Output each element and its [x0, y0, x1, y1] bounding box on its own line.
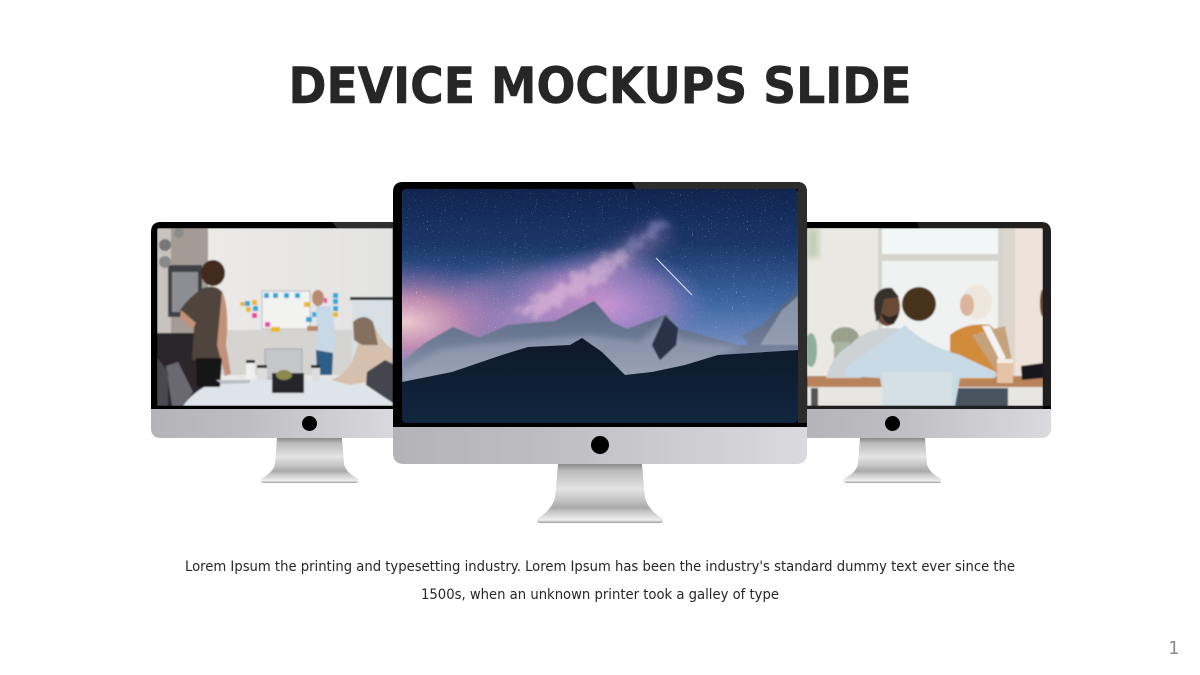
title: DEVICE MOCKUPS SLIDE [288, 57, 912, 115]
night sky [402, 189, 798, 376]
right monitor [800, 222, 1051, 483]
right monitor camera [885, 416, 900, 431]
page number: 1 [1168, 638, 1180, 659]
snowy mountains [402, 290, 798, 382]
left monitor stand [261, 438, 358, 483]
dark forest [402, 338, 798, 423]
body text: Lorem Ipsum the printing and typesetting industry. Lorem Ipsum has been the industry's standard dummy text ever since the [185, 559, 1015, 575]
left monitor bezel [151, 222, 400, 409]
left monitor [151, 222, 400, 483]
body text: 1500s, when an unknown printer took a galley of type [421, 587, 779, 603]
star field [402, 189, 798, 354]
right screen photo: team at table [805, 228, 1046, 406]
body text [185, 559, 1015, 603]
left screen photo: meeting at whiteboard [157, 228, 393, 406]
right monitor stand [844, 438, 941, 483]
milky way [495, 218, 672, 330]
right monitor bezel [800, 222, 1051, 409]
shooting star [656, 258, 692, 295]
slide [151, 65, 1178, 654]
left monitor chin [151, 408, 400, 438]
center monitor [393, 182, 807, 523]
center monitor bezel [393, 182, 807, 427]
center monitor camera [591, 436, 609, 454]
center monitor chin [393, 425, 807, 464]
center monitor stand [537, 464, 663, 523]
left monitor camera [302, 416, 317, 431]
center screen photo: milky way over mountains [402, 189, 798, 423]
right monitor chin [800, 408, 1051, 438]
